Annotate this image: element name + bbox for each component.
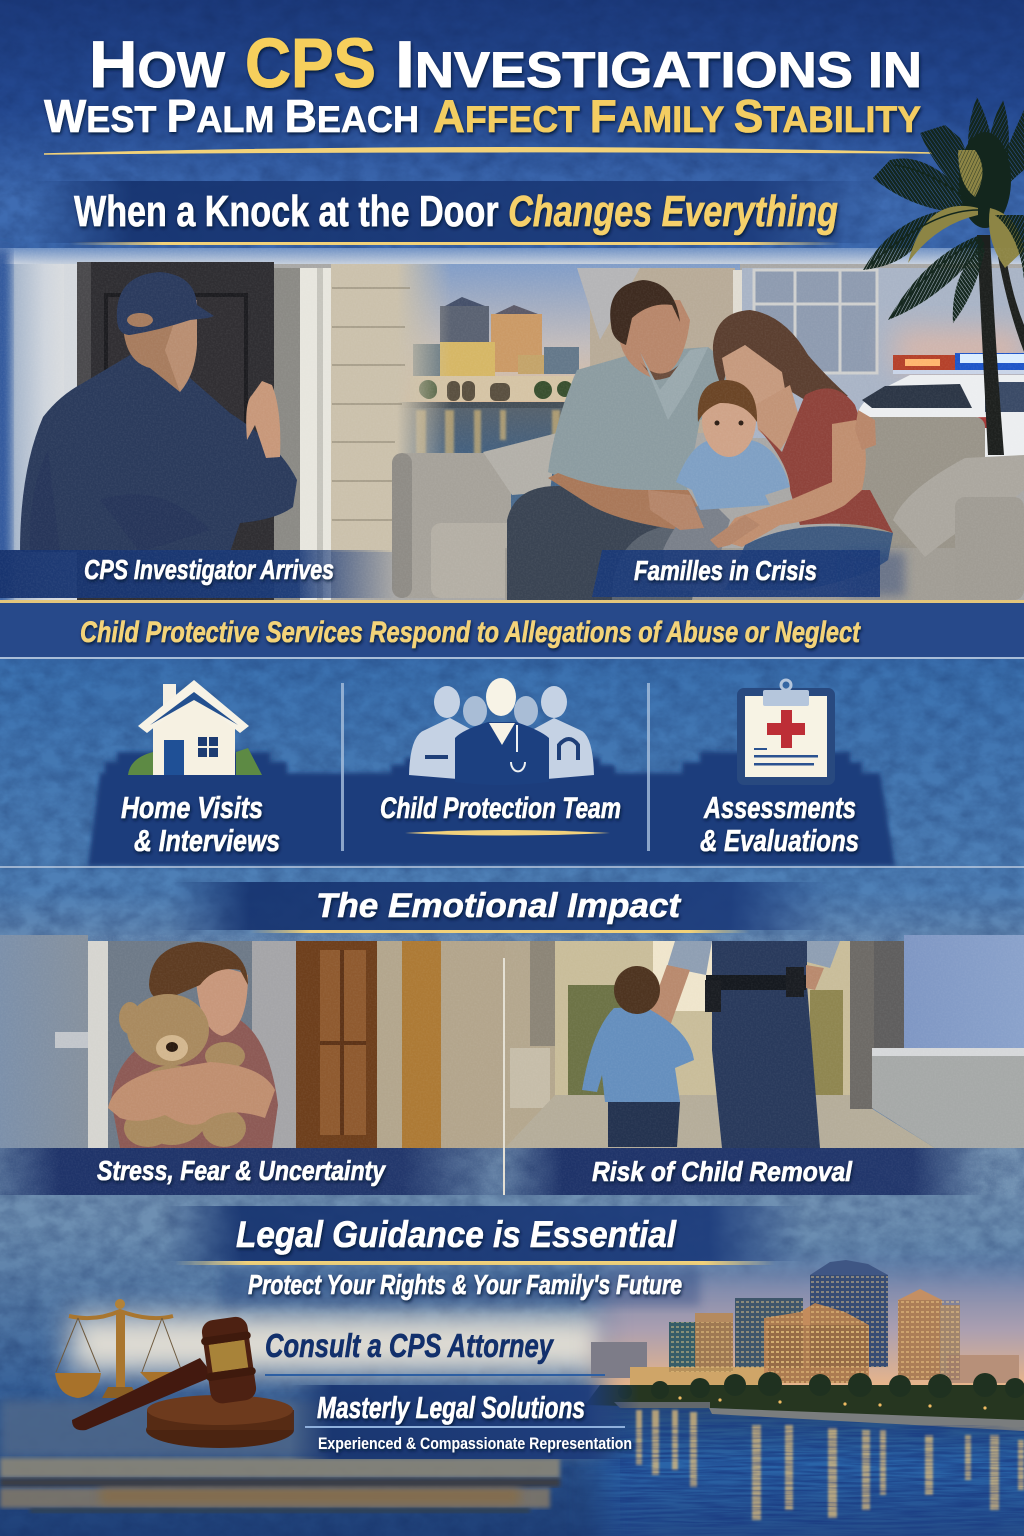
title line one: INVESTIGATIONS IN [395, 27, 922, 101]
label: Home Visits [121, 790, 263, 825]
title line two: AFFECT FAMILY STABILITY [433, 90, 921, 142]
middle: city and water [395, 262, 740, 555]
title line two [44, 90, 921, 142]
scene: child with teddy [0, 935, 505, 1148]
skyline [395, 297, 600, 465]
masterly legal solutions: Masterly Legal Solutions [317, 1390, 585, 1425]
panel: legal guidance [0, 1206, 1024, 1536]
gold divider [0, 600, 1024, 603]
caption: risk: Risk of Child Removal [592, 1156, 853, 1187]
tagline [220, 1269, 700, 1306]
scene: risk of child removal [505, 935, 1024, 1148]
boy [582, 1007, 694, 1102]
panel: emotional scenes [0, 935, 1024, 1195]
city and waterfront [580, 1262, 1024, 1536]
banner: when a knock [30, 181, 880, 245]
panel: hero scene [0, 97, 1024, 600]
couch [392, 417, 1024, 600]
investigator [20, 272, 297, 552]
skyline [585, 1260, 1024, 1525]
icon: scales of justice [55, 1299, 183, 1398]
service: child protection team [380, 678, 621, 836]
palm tree [863, 97, 1024, 455]
child [111, 1020, 278, 1148]
risk caption bar [505, 1148, 985, 1195]
right: room and window [577, 268, 1024, 440]
label: Child Protection Team [380, 792, 621, 825]
title line one [89, 24, 922, 102]
legal banner: Legal Guidance is Essential [236, 1214, 677, 1255]
dividers [341, 683, 650, 851]
door [296, 941, 377, 1148]
caption: families: Familles in Crisis [634, 555, 817, 586]
icon: gavel [72, 1315, 294, 1448]
hands [648, 490, 760, 548]
family [507, 280, 893, 600]
title line one: CPS [245, 24, 376, 102]
police car [856, 353, 1024, 460]
title underline [44, 148, 932, 154]
icon: clipboard [737, 680, 835, 785]
panel background [0, 1315, 620, 1513]
consult a cps attorney: Consult a CPS Attorney [265, 1327, 554, 1364]
banner: the emotional impact [0, 866, 1024, 933]
title line two: WEST PALM BEACH [44, 90, 419, 142]
icon: team [409, 678, 594, 785]
child [663, 380, 790, 590]
mother [713, 310, 893, 590]
service: home visits [121, 680, 280, 858]
panel: services [88, 678, 895, 866]
teddy bear [119, 994, 246, 1147]
dark band [88, 752, 895, 866]
banner: child protective services [0, 603, 1024, 659]
title [44, 24, 922, 142]
caption: stress: Stress, Fear & Uncertainty [97, 1155, 386, 1186]
officer [712, 941, 820, 1148]
left scene: doorway [0, 248, 1024, 600]
stress caption bar [0, 958, 505, 1195]
service: assessments [700, 680, 859, 858]
water reflections [636, 1410, 1024, 1520]
supporting line: Experienced & Compassionate Representation [318, 1434, 632, 1453]
label: & Interviews [134, 823, 280, 858]
banner heading: When a Knock at the Door Changes Everything [74, 187, 838, 236]
banner: the emotional impact: The Emotional Impact [316, 887, 682, 925]
caption: families [592, 550, 905, 597]
icon: house [128, 680, 262, 775]
caption: investigator: CPS Investigator Arrives [84, 554, 334, 585]
masterly legal solutions [290, 1385, 640, 1459]
label: Assessments [703, 790, 856, 825]
caption: investigator [0, 550, 395, 598]
title line one: HOW [89, 27, 226, 101]
label [121, 790, 280, 858]
label [700, 790, 859, 858]
tagline: Protect Your Rights & Your Family's Future [248, 1269, 682, 1300]
legal banner [165, 1206, 805, 1265]
father [507, 280, 745, 600]
label: & Evaluations [700, 823, 859, 858]
